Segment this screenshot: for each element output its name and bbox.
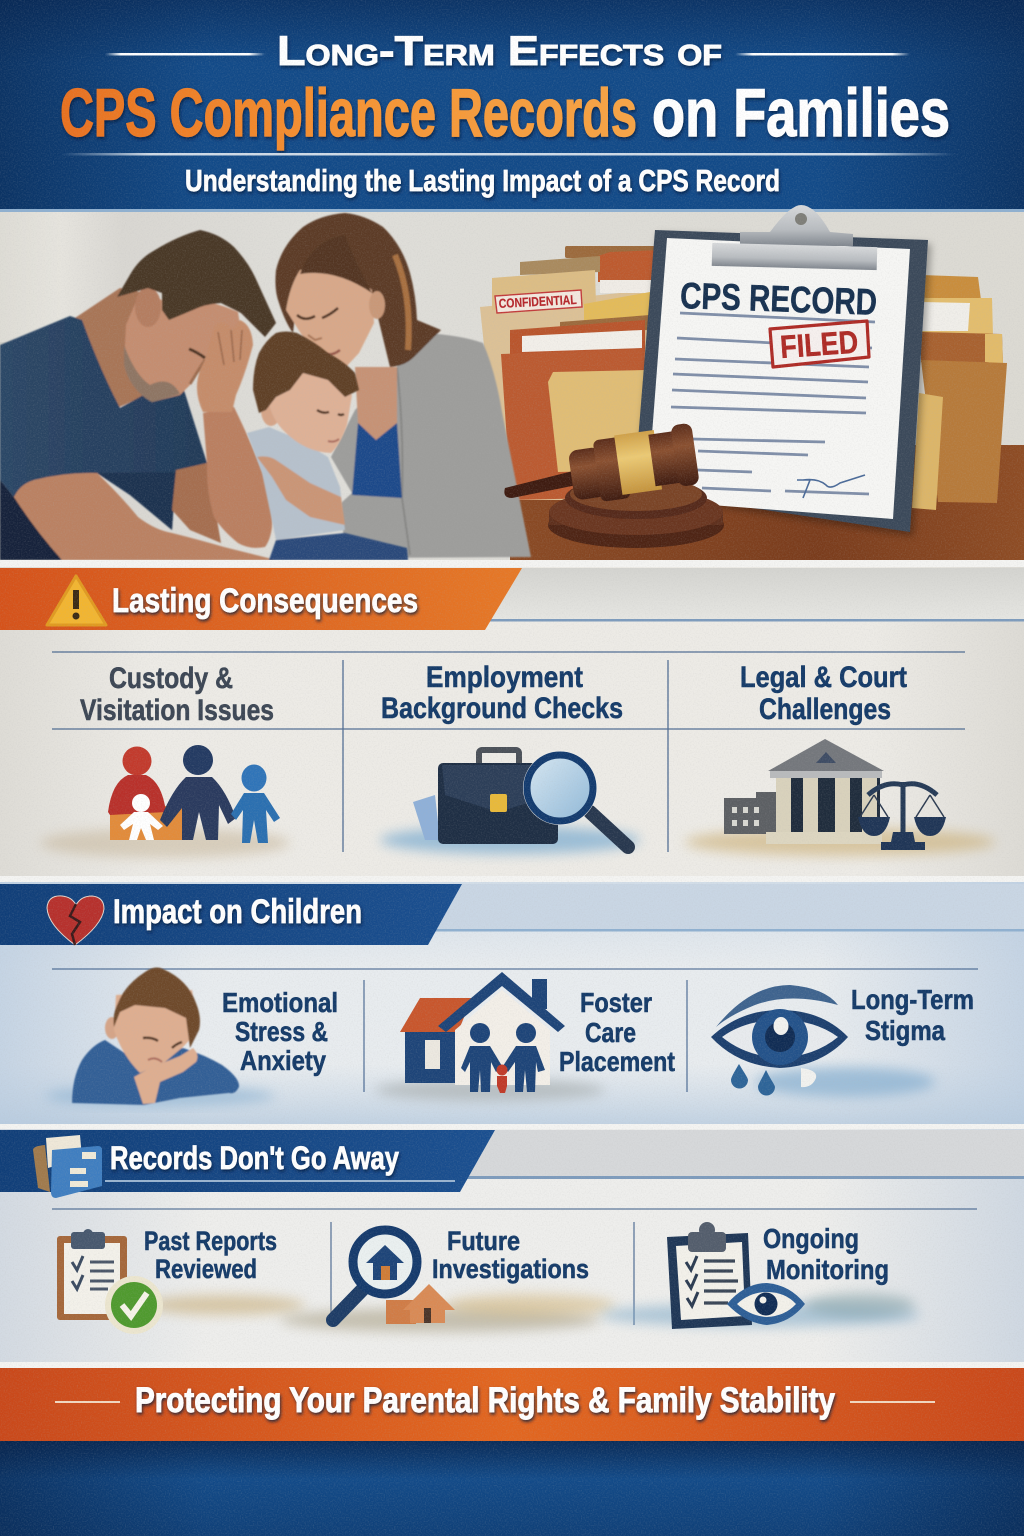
heading banner: impact on children: Impact on Children: [113, 893, 362, 931]
item: long-term stigma: Long-Term: [851, 984, 974, 1015]
confidential label: CONFIDENTIAL: [498, 292, 577, 311]
icon: clipboard with eye: [600, 1222, 920, 1329]
white divider: [0, 876, 1024, 882]
item: emotional stress: Emotional: [222, 987, 338, 1018]
item: custody and visitation: [40, 662, 290, 858]
item: ongoing monitoring: Ongoing: [763, 1223, 859, 1254]
hero photo panel: [0, 205, 1024, 560]
footer banner: [0, 1368, 1024, 1441]
header band: [0, 0, 1024, 212]
item: legal and court: Legal & Court: [740, 661, 907, 694]
item: future investigations: [280, 1226, 615, 1332]
item: employment background checks: Background Checks: [381, 692, 623, 725]
table: [510, 445, 1024, 560]
filed stamp: FILED: [779, 324, 859, 365]
item: employment background checks: Employment: [426, 661, 583, 694]
item: foster care: Care: [585, 1017, 636, 1048]
clipboard with CPS record: [634, 205, 928, 532]
icon: magnifier over houses: [280, 1230, 615, 1332]
panel: records don't go away: [0, 1129, 1024, 1363]
title: on Families: [652, 75, 950, 151]
signature: [797, 475, 865, 498]
icon: warning triangle: [47, 576, 106, 625]
clip: [712, 205, 877, 270]
title: CPS Compliance Records: [60, 75, 637, 151]
item: foster care: Placement: [559, 1046, 675, 1077]
folders right: [912, 275, 1007, 510]
woman: [275, 213, 531, 558]
white divider: [0, 1362, 1024, 1368]
item: ongoing monitoring: [600, 1222, 920, 1329]
item: foster care: [375, 972, 675, 1101]
item: long-term stigma: Stigma: [865, 1015, 945, 1046]
title: Long-Term Effects of: [277, 27, 722, 74]
item: legal and court: [685, 661, 995, 856]
item: future investigations: Investigations: [432, 1254, 589, 1284]
item: custody and visitation: Custody &: [109, 662, 233, 695]
title: Understanding the Lasting Impact of a CPS Record: [185, 163, 780, 198]
bottom blue band: [0, 1441, 1024, 1536]
item: past reports: Reviewed: [155, 1254, 257, 1284]
item: past reports: Past Reports: [144, 1226, 277, 1256]
icon: sad boy: [45, 968, 275, 1106]
icon: clipboard with check: [57, 1229, 305, 1334]
icon: house with family: [375, 972, 605, 1101]
heading banner: records: Records Don't Go Away: [110, 1140, 399, 1176]
item: ongoing monitoring: Monitoring: [766, 1254, 889, 1285]
item: past reports: [57, 1226, 305, 1334]
gavel: [504, 423, 724, 548]
icon: briefcase and magnifier: [380, 750, 640, 854]
footer banner: Protecting Your Parental Rights & Family Stability: [135, 1381, 835, 1420]
panel: impact on children: [0, 882, 1024, 1125]
item: legal and court: Challenges: [759, 693, 891, 726]
record text: CPS RECORD: [679, 275, 878, 323]
item: foster care: Foster: [580, 987, 652, 1018]
heading banner: lasting consequences: Lasting Consequences: [112, 582, 418, 620]
item: emotional stress: Anxiety: [240, 1045, 326, 1076]
folders left: [480, 246, 660, 500]
heading banner: records: [0, 1130, 495, 1198]
woman's hand: [257, 456, 345, 525]
title: [60, 27, 955, 198]
white divider: [0, 560, 1024, 567]
panel: lasting consequences: [0, 567, 1024, 877]
icon: broken heart: [47, 896, 104, 945]
icon: courthouse and scales: [685, 739, 995, 856]
item: emotional stress: [45, 968, 338, 1106]
man: [0, 230, 276, 560]
item: long-term stigma: [711, 984, 974, 1097]
heading banner: lasting consequences: [0, 568, 522, 630]
item: custody and visitation: Visitation Issues: [80, 694, 274, 727]
item: future investigations: Future: [447, 1226, 520, 1256]
white divider: [0, 1124, 1024, 1129]
document lines: [671, 313, 875, 494]
heading banner: impact on children: [0, 884, 462, 945]
icon: family: [40, 745, 290, 858]
item: emotional stress: Stress &: [235, 1016, 328, 1047]
icon: file cabinet: [33, 1135, 102, 1198]
child: [247, 332, 408, 560]
item: employment background checks: [380, 661, 640, 854]
man's hand: [197, 320, 253, 412]
icon: crying eye: [711, 985, 935, 1097]
